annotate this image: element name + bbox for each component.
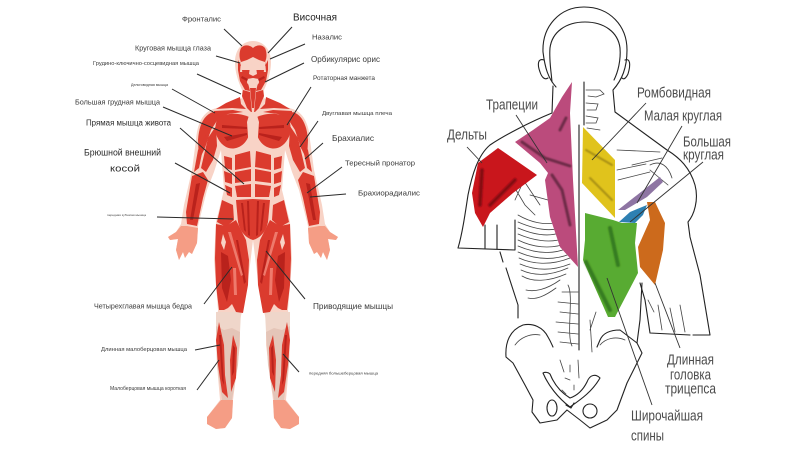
muscle: latissimus [583, 213, 638, 317]
labels: front figure muscle names: Большая грудная мышца [75, 98, 161, 106]
labels: back figure muscle names: Широчайшая [631, 408, 703, 424]
labels: front figure muscle names: Височная [293, 12, 337, 24]
labels: back figure muscle names: Малая круглая [644, 108, 722, 124]
labels: back figure muscle names: Трапеции [486, 96, 538, 114]
muscle: deltoid [472, 148, 537, 227]
labels: front figure muscle names [75, 12, 420, 392]
panel: back anatomy figure [458, 7, 710, 428]
muscle: teres major [619, 205, 647, 223]
labels: front figure muscle names: косой [110, 164, 140, 174]
labels: back figure muscle names: Большая [683, 134, 731, 150]
back figure: ribs and spine [515, 90, 685, 394]
labels: front figure muscle names: Фронталис [182, 14, 221, 24]
labels: back figure muscle names: головка [670, 366, 711, 384]
labels: front figure muscle names: Назалис [312, 34, 343, 42]
labels: front figure muscle names: Брахиорадиалис [358, 188, 420, 198]
labels: back figure leader lines [467, 103, 703, 405]
labels: front figure muscle names: Круговая мышца глаза [135, 44, 212, 52]
labels: front figure muscle names: Малоберцовая мышца короткая [110, 386, 186, 392]
muscle: rhomboid [582, 127, 615, 218]
labels: front figure muscle names: Грудино-ключично-сосцевидная мышца [93, 61, 199, 67]
labels: front figure muscle names: Брюшной внешний [84, 148, 161, 158]
back figure: body outline [458, 7, 710, 428]
labels: front figure muscle names: Ротаторная манжета [313, 76, 376, 82]
labels: front figure muscle names: Тересный пронатор [345, 158, 415, 168]
trapezius shading [522, 118, 570, 225]
labels: back figure muscle names: Дельты [447, 126, 487, 144]
labels: front figure muscle names: Брахиалис [332, 133, 375, 143]
labels: back figure muscle names: круглая [683, 146, 724, 164]
muscle: teres minor [618, 177, 663, 210]
labels: back figure muscle names: Длинная [667, 352, 714, 368]
labels: back figure muscle names: трицепса [665, 380, 717, 398]
labels: front figure leader lines [157, 27, 346, 390]
labels: front figure muscle names: передняя большеберцовая мышца [309, 370, 379, 376]
labels: front figure muscle names: Орбикулярис орис [311, 54, 381, 64]
labels: back figure muscle names [447, 84, 731, 444]
labels: front figure muscle names: Четырехглавая мышца бедра [94, 302, 193, 310]
labels: front figure muscle names: Длинная малоберцовая мышца [101, 347, 188, 353]
labels: front figure muscle names: передняя зубчатая мышца [107, 213, 146, 217]
muscle: triceps long head [638, 202, 665, 285]
labels: front figure muscle names: Дельтовидная мышца [131, 83, 168, 87]
labels: back figure muscle names: спины [631, 428, 664, 444]
labels: back figure muscle names: Ромбовидная [637, 84, 711, 102]
labels: front figure muscle names: Приводящие мышцы [313, 301, 393, 311]
labels: front figure muscle names: Двуглавая мышца плеча [322, 111, 393, 117]
labels: front figure muscle names: Прямая мышца живота [86, 118, 172, 128]
panel: front muscle figure [168, 41, 338, 429]
muscle: trapezius [515, 82, 578, 267]
